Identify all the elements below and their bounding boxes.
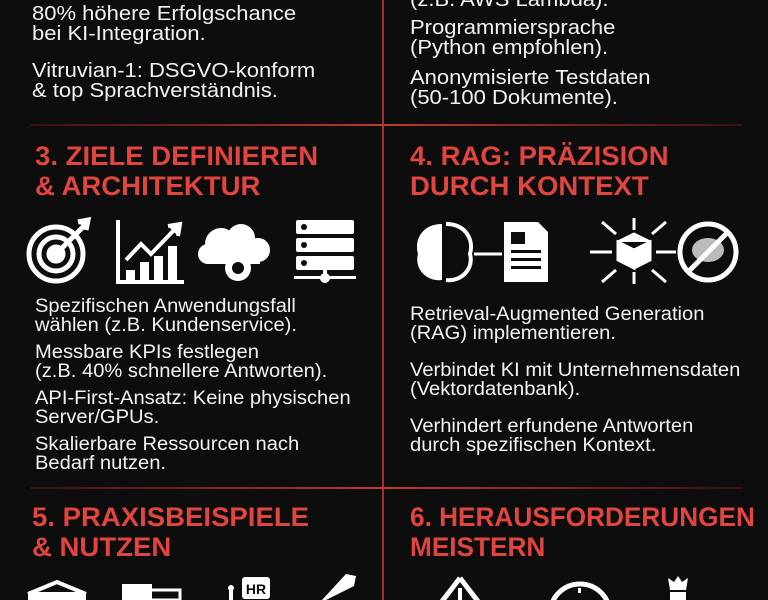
heading: section 4: [410, 141, 669, 201]
heading: section 4: DURCH KONTEXT: [410, 171, 649, 201]
icon: envelope: [28, 582, 86, 600]
horizontal divider top: [30, 124, 742, 126]
text block: section 3 bullets: [35, 296, 351, 474]
text block: section 4 bullets: (RAG) implementieren. Verbindet KI mit Unternehmensdaten: [410, 323, 740, 381]
icon: chess piece: [668, 576, 688, 600]
text block: section 2 bullets: (50-100 Dokumente).: [410, 87, 618, 109]
heading: section 4: 4. RAG: PRÄZISION: [410, 141, 669, 171]
heading: section 3: & ARCHITEKTUR: [35, 171, 260, 201]
text block: section 4 bullets: (Vektordatenbank). Verhindert erfundene Antworten: [410, 379, 693, 437]
text block: section 4 bullets: Retrieval-Augmented Generation: [410, 304, 704, 325]
icons: section 3: [26, 216, 356, 284]
text block: section 3 bullets: Server/GPUs. Skalierbare Ressourcen nach: [35, 407, 299, 455]
heading: section 5: 5. PRAXISBEISPIELE: [32, 502, 309, 532]
text block: section 3 bullets: (z.B. 40% schnellere Antworten). API-First-Ansatz: Keine physischen: [35, 361, 351, 409]
horizontal divider bottom: [30, 487, 742, 489]
icon: HR badge: [228, 577, 270, 600]
icons: section 5: [27, 574, 356, 600]
icon: HR badge: HR: [246, 581, 266, 597]
text block: section 1 bullets: & top Sprachverständnis.: [32, 80, 278, 102]
vertical divider: [382, 0, 384, 600]
text block: section 1 bullets: [32, 3, 315, 102]
text block: section 3 bullets: Bedarf nutzen.: [35, 453, 166, 474]
icon: target: [29, 220, 88, 281]
text block: section 3 bullets: wählen (z.B. Kundenservice). Messbare KPIs festlegen: [35, 315, 297, 363]
icon: no brain: [680, 224, 736, 280]
icon: warning triangle: [440, 578, 480, 600]
text block: section 4 bullets: [410, 304, 740, 456]
heading: section 5: [32, 502, 309, 562]
text block: section 3 bullets: Spezifischen Anwendungsfall: [35, 296, 296, 317]
icon: document screen: [122, 584, 180, 600]
heading: section 6: [410, 502, 755, 562]
icons: section 6: [440, 576, 688, 600]
text block: section 1 bullets: 80% höhere Erfolgschance: [32, 3, 296, 25]
text block: section 2 bullets: (Python empfohlen). Anonymisierte Testdaten: [410, 37, 651, 89]
text block: section 1 bullets: bei KI-Integration. Vitruvian-1: DSGVO-konform: [32, 23, 315, 82]
heading: section 5: & NUTZEN: [32, 532, 171, 562]
icon: server rack: [294, 220, 356, 283]
text block: section 2 bullets: [410, 0, 651, 109]
heading: section 3: [35, 141, 318, 201]
heading: section 3: 3. ZIELE DEFINIEREN: [35, 141, 318, 171]
icon: cube with arrows: [590, 218, 676, 284]
icon: clock: [550, 584, 610, 600]
text block: section 4 bullets: durch spezifischen Kontext.: [410, 435, 656, 456]
heading: section 6: MEISTERN: [410, 532, 545, 562]
icons: section 4: [417, 218, 738, 284]
icon: cloud gear: [198, 224, 270, 281]
icon: brain to document: [417, 222, 548, 282]
heading: section 6: 6. HERAUSFORDERUNGEN: [410, 502, 755, 532]
icon: rocket: [322, 574, 356, 600]
icon: growth chart: [118, 220, 184, 282]
